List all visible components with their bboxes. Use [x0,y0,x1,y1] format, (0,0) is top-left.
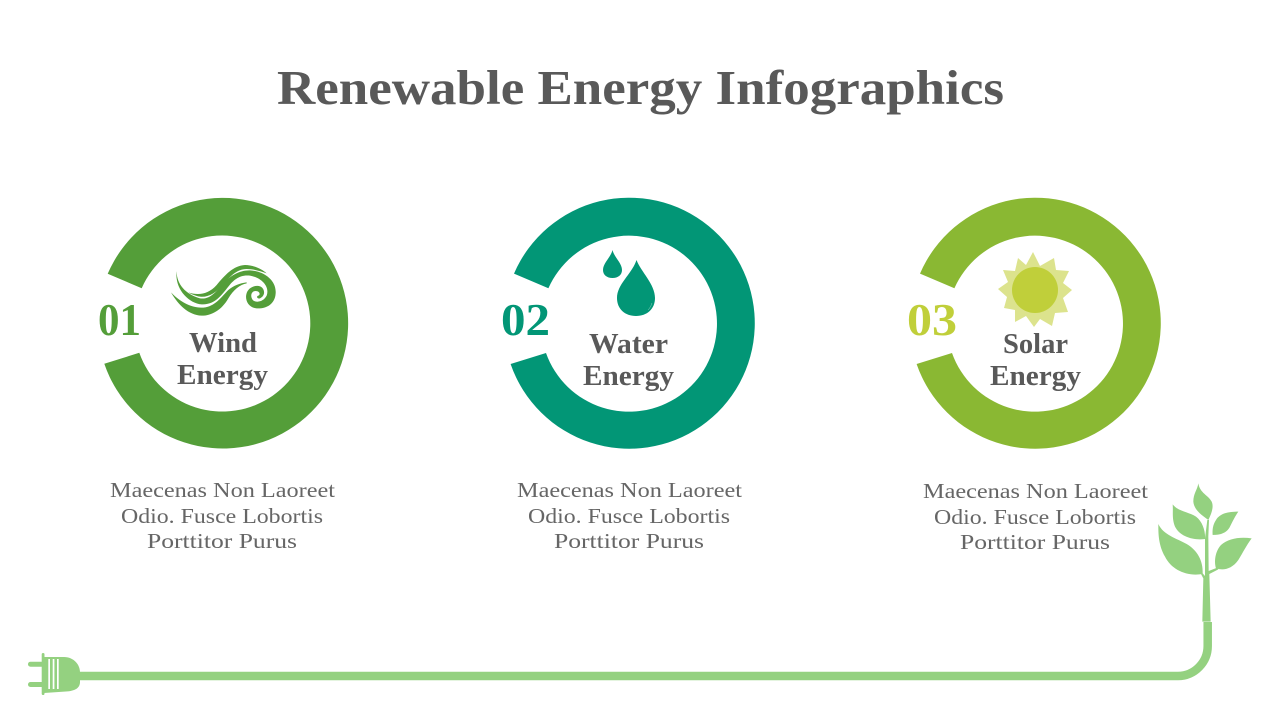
panel: wind energy [98,198,348,553]
description: solar: Maecenas Non Laoreet [923,479,1148,503]
number 01: 01 [98,294,141,345]
icon: sun [998,252,1072,327]
description: solar: Porttitor Purus [960,530,1110,554]
panel: water energy [501,198,755,553]
description: water [517,478,742,553]
icon: plant [1158,483,1252,622]
label: water energy: Water [589,329,668,360]
label: solar energy: Energy [990,361,1081,392]
panel: solar energy [907,198,1161,554]
label: wind energy: Wind [189,328,257,359]
title: Renewable Energy Infographics [277,60,1004,115]
icon: wind [171,265,276,316]
description: solar [923,479,1148,554]
description: wind: Porttitor Purus [147,529,297,553]
description: wind [110,478,335,553]
description: wind: Odio. Fusce Lobortis [121,504,323,528]
label: wind energy: Energy [177,360,268,391]
label: wind energy [177,328,268,391]
description: water: Maecenas Non Laoreet [517,478,742,502]
description: water: Odio. Fusce Lobortis [528,504,730,528]
icon: water drops [603,250,655,316]
description: water: Porttitor Purus [554,529,704,553]
number 02: 02 [501,294,550,345]
ring: solar [917,198,1161,449]
label: water energy: Energy [583,361,674,392]
label: solar energy [990,329,1081,392]
cable [75,622,1208,676]
description: solar: Odio. Fusce Lobortis [934,505,1136,529]
icon: plug [28,653,80,695]
description: wind: Maecenas Non Laoreet [110,478,335,502]
ring: water [511,198,755,449]
ring: wind [104,198,348,449]
label: water energy [583,329,674,392]
cable with plug and plant [28,483,1252,695]
number 03: 03 [907,294,957,345]
label: solar energy: Solar [1003,329,1068,360]
